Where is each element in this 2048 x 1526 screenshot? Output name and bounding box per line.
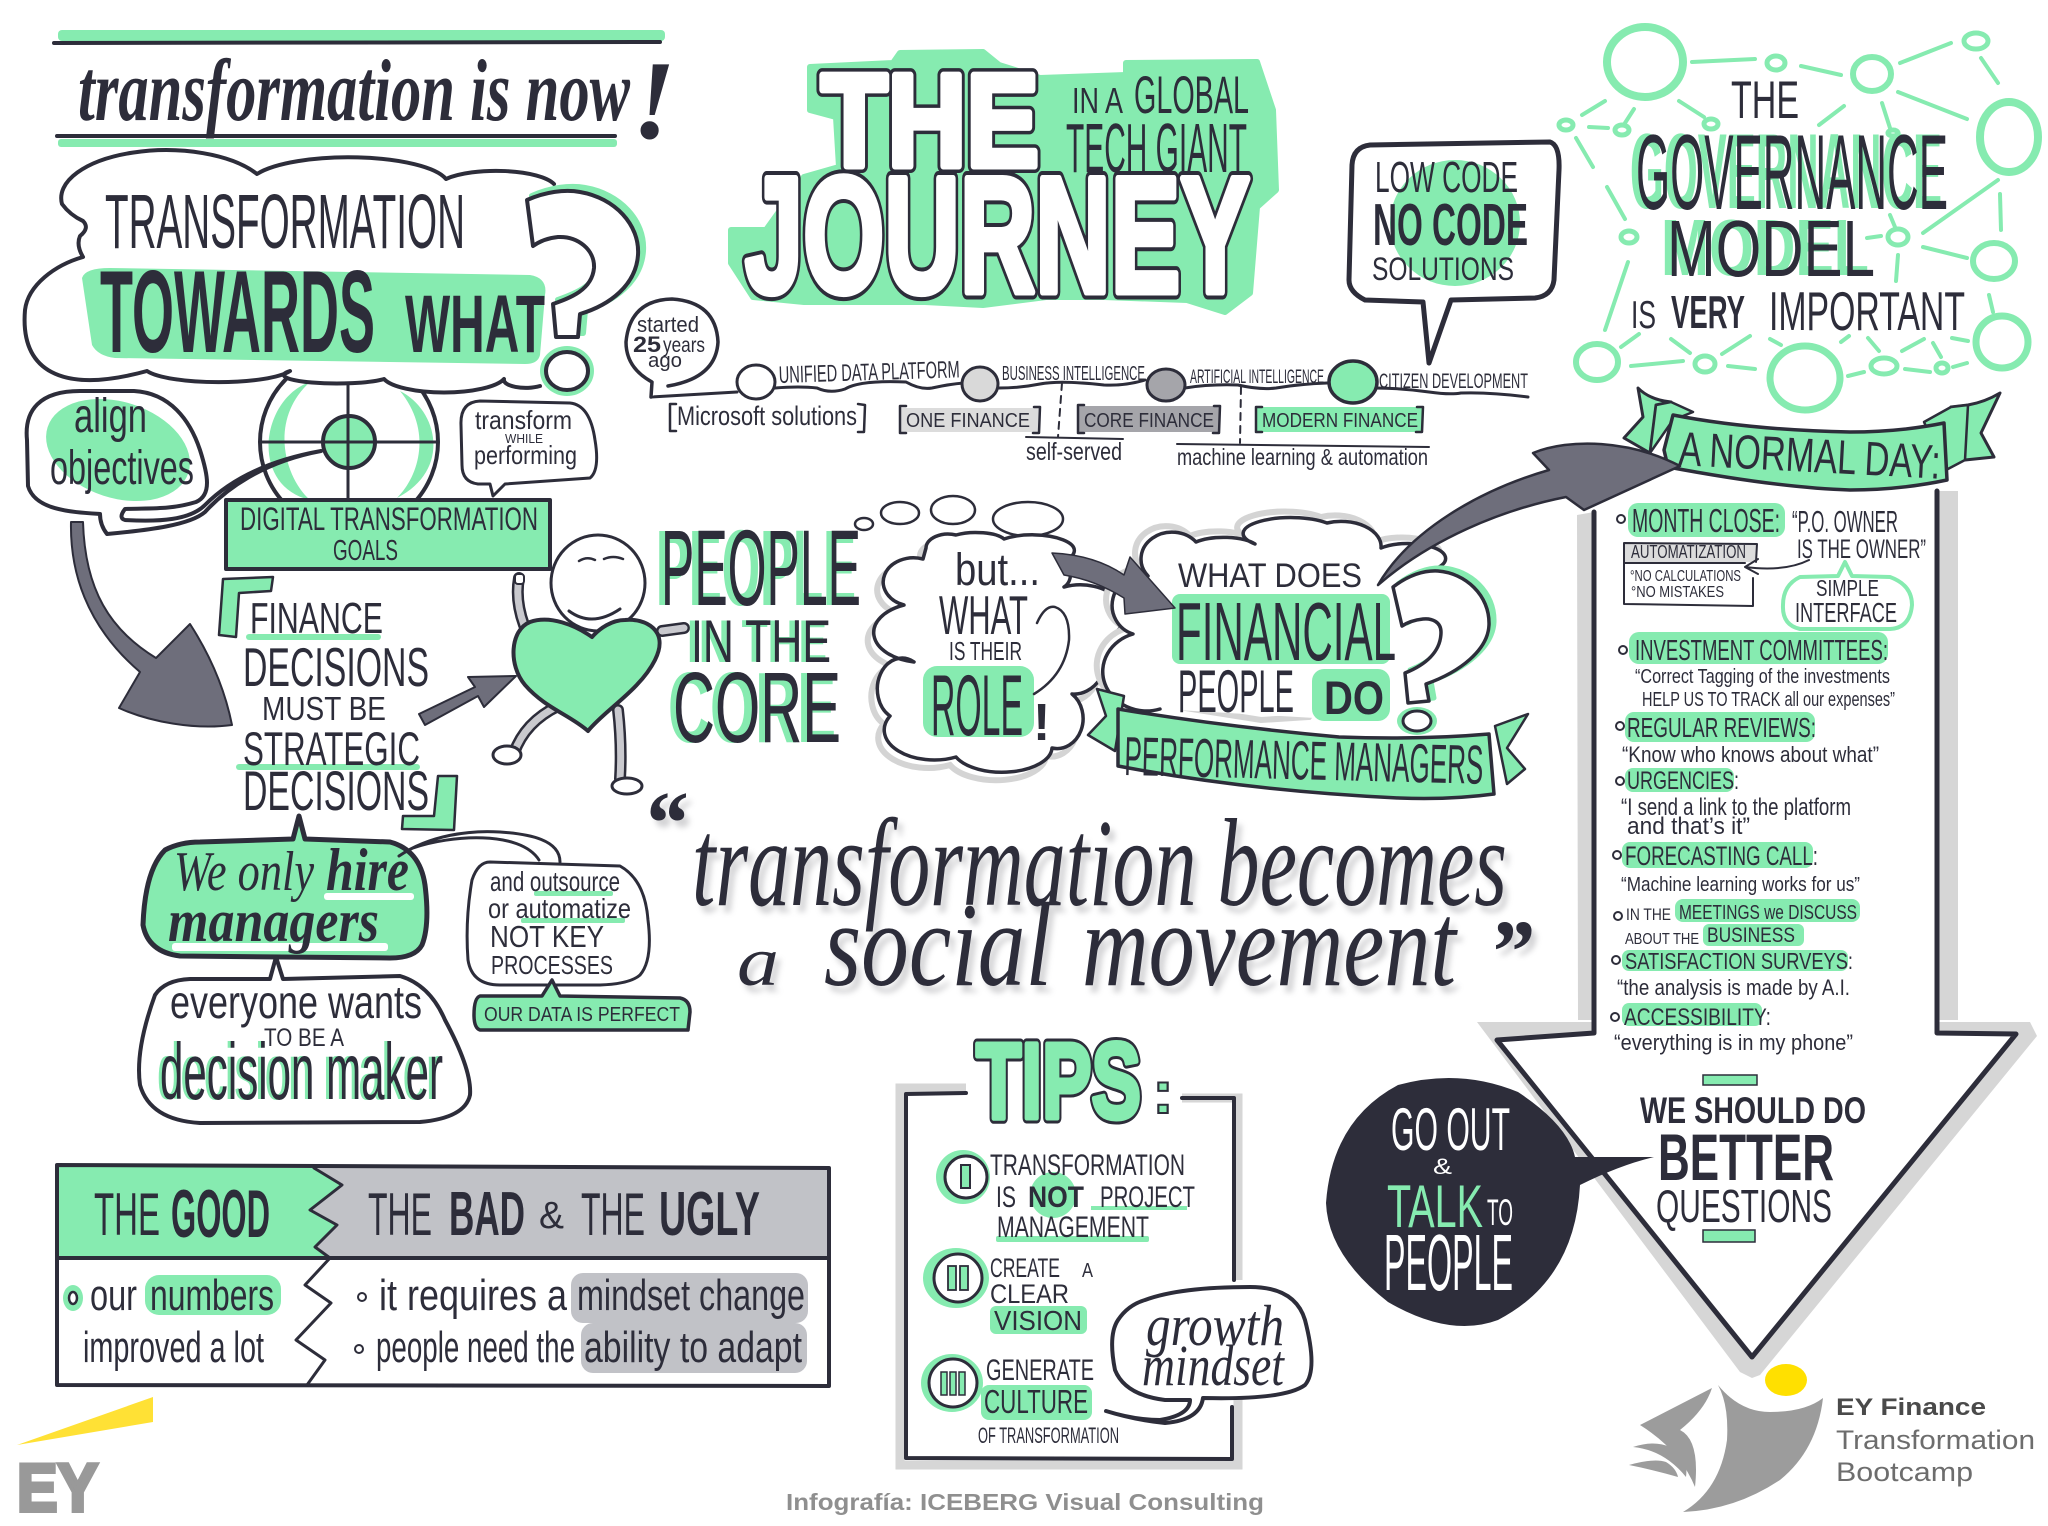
stage: microsoft solutions: Microsoft solutions bbox=[677, 401, 857, 431]
speech bubble: transform while performing bbox=[461, 401, 597, 496]
heading: people in the core: IN THE bbox=[691, 608, 831, 675]
cell: our numbers improved a lot: numbers bbox=[150, 1271, 274, 1320]
speech bubble: go out and talk to people bbox=[1326, 1078, 1654, 1326]
tip 3 bbox=[921, 1354, 1119, 1448]
banner: performance managers bbox=[1088, 689, 1528, 798]
heading: tips: : bbox=[1152, 1059, 1174, 1126]
text block: finance decisions must be strategic decisions: STRATEGIC bbox=[243, 722, 420, 775]
tip 2: A bbox=[1082, 1260, 1094, 1282]
stage: core finance: CORE FINANCE bbox=[1084, 410, 1214, 432]
heading: the journey in a global tech giant bbox=[731, 47, 1276, 327]
speech bubble: align objectives: objectives bbox=[50, 442, 194, 495]
note: machine learning and automation: machine learning & automation bbox=[1177, 444, 1428, 470]
item: meetings: BUSINESS bbox=[1707, 924, 1795, 947]
arrow: small gray arrow to heart bbox=[419, 676, 516, 725]
highlight: towards what bbox=[82, 268, 545, 364]
title: transformation is now: ! bbox=[632, 39, 676, 163]
banner: performance managers: PERFORMANCE MANAGERS bbox=[1124, 725, 1484, 796]
timeline: journey from microsoft solutions to modern finance: BUSINESS INTELLIGENCE bbox=[1002, 363, 1145, 385]
cell: mindset change and ability to adapt: mindset change bbox=[577, 1271, 805, 1320]
panel: but what is their role: WHAT bbox=[939, 584, 1028, 646]
text block: finance decisions must be strategic decisions bbox=[219, 577, 457, 830]
speech bubble: transform while performing: performing bbox=[474, 440, 577, 470]
item: satisfaction surveys bbox=[1612, 948, 1853, 1000]
speech bubble: growth mindset bbox=[1106, 1287, 1312, 1423]
cell: mindset change and ability to adapt bbox=[355, 1271, 808, 1373]
timeline: journey from microsoft solutions to modern finance bbox=[626, 299, 1528, 470]
callout: started 25 years ago: years bbox=[663, 334, 705, 357]
speech bubble: everyone wants to be a decision maker: everyone wants bbox=[170, 976, 422, 1028]
item: investment committees bbox=[1619, 632, 1895, 711]
quote: transformation becomes a social movement: “ bbox=[642, 774, 687, 873]
heading: tips: TIPS bbox=[976, 1020, 1141, 1141]
speech bubble: everyone wants to be a decision maker: TO BE A bbox=[264, 1024, 344, 1052]
speech bubble: and outsource or automatize: and outsource bbox=[490, 866, 620, 897]
item: urgencies bbox=[1616, 767, 1851, 840]
quote: transformation becomes a social movement: ” bbox=[1488, 903, 1533, 1002]
tip 3: OF TRANSFORMATION bbox=[978, 1423, 1119, 1448]
table: the good, the bad and the ugly bbox=[57, 1165, 829, 1386]
table: the good, the bad and the ugly: THE bbox=[581, 1181, 645, 1248]
text block: we should do better questions bbox=[1640, 1075, 1866, 1242]
logo: EY finance transformation bootcamp: Transformation bbox=[1836, 1425, 2035, 1455]
item: meetings: MEETINGS we DISCUSS bbox=[1679, 902, 1857, 924]
label: our data is perfect: OUR DATA IS PERFECT bbox=[484, 1004, 680, 1026]
item: satisfaction surveys: SATISFACTION SURVEYS: bbox=[1625, 948, 1853, 974]
icon: question mark bbox=[527, 187, 643, 396]
tip 3: CULTURE bbox=[984, 1383, 1088, 1420]
table: the good, the bad and the ugly: THE bbox=[94, 1181, 160, 1248]
arrow: gray arrow to what does financial people do bbox=[1052, 553, 1175, 614]
text: PEOPLE bbox=[656, 507, 856, 628]
speech bubble: and outsource or automatize bbox=[399, 832, 649, 985]
milestone nodes bbox=[737, 365, 775, 399]
timeline: journey from microsoft solutions to modern finance: ARTIFICIAL INTELLIGENCE bbox=[1190, 367, 1324, 388]
item: accessibility bbox=[1611, 1003, 1853, 1055]
tip 1 bbox=[936, 1149, 1195, 1244]
panel: tips bbox=[900, 1020, 1312, 1465]
item: accessibility: “everything is in my phone” bbox=[1614, 1030, 1853, 1055]
callout: simple interface: INTERFACE bbox=[1795, 597, 1897, 628]
item: urgencies: URGENCIES: bbox=[1627, 767, 1739, 795]
item: investment committees: HELP US TO TRACK all our expenses” bbox=[1642, 689, 1895, 711]
label: our data is perfect bbox=[474, 980, 690, 1030]
stage: one finance: ONE FINANCE bbox=[906, 410, 1030, 432]
item: investment committees: INVESTMENT COMMITTEES: bbox=[1635, 635, 1888, 667]
panel: what does financial people do bbox=[1097, 512, 1494, 735]
header: the good bbox=[57, 1165, 342, 1258]
table: the good, the bad and the ugly: & bbox=[539, 1195, 564, 1237]
panel: transformation towards what cloud bbox=[25, 150, 643, 396]
speech bubble: and outsource or automatize: PROCESSES bbox=[491, 950, 613, 980]
panel: transformation towards what cloud: TOWARDS bbox=[100, 246, 375, 377]
item: forecasting call bbox=[1613, 841, 1860, 896]
item: urgencies: and that’s it” bbox=[1627, 813, 1750, 840]
heading: the governance model is very important: MODEL bbox=[1667, 204, 1875, 293]
speech bubble: we only hire managers bbox=[143, 816, 427, 958]
text block: we should do better questions: WE SHOULD DO bbox=[1640, 1090, 1866, 1131]
panel: big down arrow bbox=[1477, 491, 2037, 1378]
quote: transformation becomes a social movement: social bbox=[824, 878, 1052, 1011]
speech bubble: low code no code solutions bbox=[1349, 142, 1559, 363]
speech bubble: growth mindset: mindset bbox=[1142, 1333, 1285, 1398]
figure: person with heart bbox=[493, 535, 684, 794]
tip 3: GENERATE bbox=[986, 1354, 1094, 1387]
item: forecasting call: FORECASTING CALL: bbox=[1625, 841, 1818, 871]
heading: the journey in a global tech giant: THE bbox=[821, 47, 1039, 194]
milestone labels: UNIFIED DATA PLATFORM bbox=[778, 356, 960, 389]
quote: transformation becomes a social movement: movement bbox=[1082, 878, 1458, 1011]
note: self-served: self-served bbox=[1026, 438, 1122, 466]
box: automatization: AUTOMATIZATION bbox=[1631, 542, 1746, 562]
callout: simple interface bbox=[1783, 562, 1912, 629]
cell: mindset change and ability to adapt: people need the bbox=[376, 1323, 575, 1372]
heading: the governance model is very important: MODEL bbox=[1661, 203, 1869, 292]
heading: the journey in a global tech giant: JOURNEY bbox=[745, 143, 1250, 327]
tip 2: VISION bbox=[994, 1305, 1082, 1336]
panel: what does financial people do: WHAT DOES bbox=[1178, 557, 1362, 595]
speech bubble: transform while performing: transform bbox=[475, 405, 572, 435]
heading: people in the core bbox=[656, 507, 861, 764]
box: automatization: °NO MISTAKES bbox=[1631, 584, 1724, 601]
panel: what does financial people do: FINANCIAL bbox=[1176, 585, 1396, 678]
speech bubble: low code no code solutions: LOW CODE bbox=[1375, 153, 1518, 202]
text block: we should do better questions: BETTER bbox=[1658, 1120, 1834, 1194]
logo: EY finance transformation bootcamp bbox=[1629, 1364, 2035, 1512]
quote: transformation becomes a social movement bbox=[642, 774, 1533, 1011]
panel: what does financial people do: DO bbox=[1324, 671, 1384, 724]
callout: started 25 years ago: ago bbox=[648, 350, 682, 372]
tip 1: PROJECT bbox=[1100, 1181, 1195, 1214]
item: month close bbox=[1617, 502, 1926, 629]
panel: but what is their role: ROLE bbox=[931, 658, 1023, 754]
text block: finance decisions must be strategic decisions: DECISIONS bbox=[243, 759, 429, 822]
text: PEOPLE bbox=[661, 507, 861, 628]
callout: started 25 years ago bbox=[626, 299, 718, 397]
cell: our numbers improved a lot: improved a lot bbox=[83, 1323, 264, 1372]
title: transformation is now: transformation is now bbox=[78, 43, 630, 140]
heading: the journey in a global tech giant: IN A bbox=[1072, 80, 1123, 121]
speech bubble: go out and talk to people: TALK bbox=[1387, 1173, 1483, 1240]
cell: mindset change and ability to adapt: ability to adapt bbox=[584, 1323, 802, 1372]
speech bubble: growth mindset: growth bbox=[1146, 1293, 1284, 1358]
banner: a normal day bbox=[1624, 388, 2000, 490]
logo: EY: EY bbox=[17, 1450, 98, 1526]
logo: EY finance transformation bootcamp: EY Finance bbox=[1836, 1394, 1986, 1421]
callout: started 25 years ago: 25 bbox=[633, 332, 661, 357]
stage: modern finance: MODERN FINANCE bbox=[1262, 410, 1418, 432]
blob bbox=[33, 381, 203, 519]
tip 2 bbox=[923, 1248, 1094, 1336]
icon: target bbox=[260, 353, 438, 531]
item: forecasting call: “Machine learning works for us” bbox=[1621, 874, 1860, 896]
tip 2: CLEAR bbox=[990, 1279, 1069, 1309]
text block: finance decisions must be strategic decisions: MUST BE bbox=[262, 690, 386, 727]
speech bubble: and outsource or automatize: NOT KEY bbox=[490, 919, 604, 954]
icon: question mark bbox=[1393, 568, 1494, 735]
tip 1: TRANSFORMATION bbox=[990, 1149, 1185, 1182]
heading: the journey in a global tech giant: GLOBAL bbox=[1134, 66, 1249, 125]
stage: core finance bbox=[1077, 405, 1220, 433]
speech bubble: we only hire managers: hire bbox=[326, 837, 409, 903]
box: automatization: °NO CALCULATIONS bbox=[1630, 568, 1741, 585]
speech bubble: low code no code solutions: NO CODE bbox=[1373, 192, 1528, 258]
thought bubbles bbox=[855, 496, 1063, 536]
tip 2: CREATE bbox=[990, 1253, 1060, 1283]
item: month close: “P.O. OWNER bbox=[1792, 504, 1898, 539]
speech bubble: align objectives bbox=[27, 381, 321, 534]
timeline: journey from microsoft solutions to modern finance: CITIZEN DEVELOPMENT bbox=[1379, 370, 1528, 393]
table: the good, the bad and the ugly: THE bbox=[368, 1181, 432, 1248]
item: satisfaction surveys: “the analysis is made by A.I. bbox=[1617, 975, 1850, 1000]
heading: the governance model is very important: IS bbox=[1631, 294, 1656, 337]
item: meetings: IN THE bbox=[1626, 905, 1671, 924]
item: meetings bbox=[1614, 899, 1860, 948]
panel: but what is their role: ! bbox=[1033, 694, 1050, 752]
speech bubble: and outsource or automatize: or automatize bbox=[488, 893, 631, 924]
text block: finance decisions must be strategic decisions: FINANCE bbox=[250, 594, 383, 643]
speech bubble: everyone wants to be a decision maker: decision maker bbox=[157, 1027, 440, 1116]
speech bubble: we only hire managers: We only bbox=[174, 841, 314, 903]
green backdrop bbox=[731, 52, 1276, 312]
callout: simple interface: SIMPLE bbox=[1816, 575, 1879, 601]
heading: transformation: TRANSFORMATION bbox=[105, 179, 465, 265]
item: urgencies: “I send a link to the platform bbox=[1621, 794, 1851, 821]
quote: transformation becomes a social movement: a bbox=[737, 924, 779, 1001]
speech bubble: everyone wants to be a decision maker bbox=[139, 957, 470, 1123]
speech bubble: go out and talk to people: GO OUT bbox=[1391, 1096, 1510, 1163]
header: the bad and the ugly bbox=[310, 1168, 829, 1258]
panel: transformation towards what cloud: WHAT bbox=[405, 279, 545, 370]
speech bubble: go out and talk to people: TO bbox=[1487, 1192, 1513, 1233]
box: digital transformation goals: GOALS bbox=[333, 535, 398, 567]
logo: EY bbox=[17, 1397, 153, 1526]
speech bubble: go out and talk to people: & bbox=[1433, 1154, 1452, 1179]
item: accessibility: ACCESSIBILITY: bbox=[1624, 1004, 1771, 1031]
cell: mindset change and ability to adapt: it requires a bbox=[379, 1271, 567, 1320]
text: TECH GIANT bbox=[1066, 109, 1247, 187]
speech bubble: align objectives: align bbox=[74, 390, 147, 443]
box: digital transformation goals bbox=[226, 500, 550, 569]
title: transformation is now bbox=[54, 30, 676, 163]
heading: people in the core: CORE bbox=[673, 652, 841, 764]
item: regular reviews: REGULAR REVIEWS: bbox=[1627, 712, 1816, 743]
panel: but what is their role: but... bbox=[955, 544, 1040, 595]
panel: but what is their role: IS THEIR bbox=[949, 636, 1022, 666]
box: automatization bbox=[1624, 542, 1809, 606]
item: regular reviews bbox=[1616, 712, 1879, 767]
heading: the governance model is very important: VERY bbox=[1671, 286, 1745, 338]
item: month close: MONTH CLOSE: bbox=[1632, 502, 1780, 539]
cell: our numbers improved a lot: our bbox=[90, 1271, 137, 1320]
speech bubble: transform while performing: WHILE bbox=[505, 431, 543, 446]
speech bubble: low code no code solutions: SOLUTIONS bbox=[1372, 251, 1514, 287]
quote: transformation becomes a social movement: transformation becomes bbox=[692, 795, 1507, 933]
item: meetings: ABOUT THE bbox=[1625, 931, 1699, 948]
item: investment committees: “Correct Tagging of the investments bbox=[1635, 666, 1890, 688]
callout: started 25 years ago: started bbox=[637, 312, 699, 337]
tip 1: NOT bbox=[1028, 1181, 1084, 1214]
text block: we should do better questions: QUESTIONS bbox=[1656, 1180, 1832, 1232]
cell: our numbers improved a lot bbox=[63, 1271, 281, 1372]
heading: the governance model is very important bbox=[1630, 71, 1965, 342]
heading: people in the core: IN THE bbox=[687, 608, 827, 675]
tip 1: IS bbox=[996, 1181, 1016, 1214]
text block: finance decisions must be strategic decisions: DECISIONS bbox=[243, 636, 429, 698]
panel: what does financial people do: PEOPLE bbox=[1178, 658, 1294, 725]
item: regular reviews: “Know who knows about what” bbox=[1622, 742, 1879, 767]
logo: EY finance transformation bootcamp: Bootcamp bbox=[1836, 1457, 1973, 1487]
speech bubble: everyone wants to be a decision maker: decision maker bbox=[160, 1027, 443, 1116]
arrow: curved gray arrow to a normal day bbox=[1378, 444, 1680, 585]
heading: tips: TIPS bbox=[976, 1020, 1141, 1141]
banner: a normal day: A NORMAL DAY: bbox=[1677, 423, 1942, 490]
tip 1: MANAGEMENT bbox=[997, 1211, 1149, 1244]
heading: people in the core: CORE bbox=[668, 652, 836, 764]
heading: the journey in a global tech giant: JOURNEY bbox=[745, 143, 1250, 327]
table: the good, the bad and the ugly: BAD bbox=[449, 1180, 525, 1249]
credit: infografia: Infografía: ICEBERG Visual Consulting bbox=[786, 1489, 1264, 1515]
box: digital transformation goals: DIGITAL TRANSFORMATION bbox=[240, 501, 538, 537]
diagram: governance network bbox=[1559, 27, 2038, 410]
speech bubble: go out and talk to people: PEOPLE bbox=[1384, 1218, 1513, 1307]
heading: the governance model is very important: THE bbox=[1731, 71, 1799, 130]
heading: the journey in a global tech giant: THE bbox=[821, 47, 1039, 194]
table: the good, the bad and the ugly: GOOD bbox=[171, 1176, 270, 1252]
speech bubble: we only hire managers: managers bbox=[168, 888, 379, 954]
arrow: curved gray arrow to finance decisions bbox=[71, 522, 232, 726]
table: the good, the bad and the ugly: UGLY bbox=[659, 1180, 760, 1249]
panel: but what is their role bbox=[855, 496, 1124, 780]
item: month close: IS THE OWNER” bbox=[1797, 534, 1926, 564]
